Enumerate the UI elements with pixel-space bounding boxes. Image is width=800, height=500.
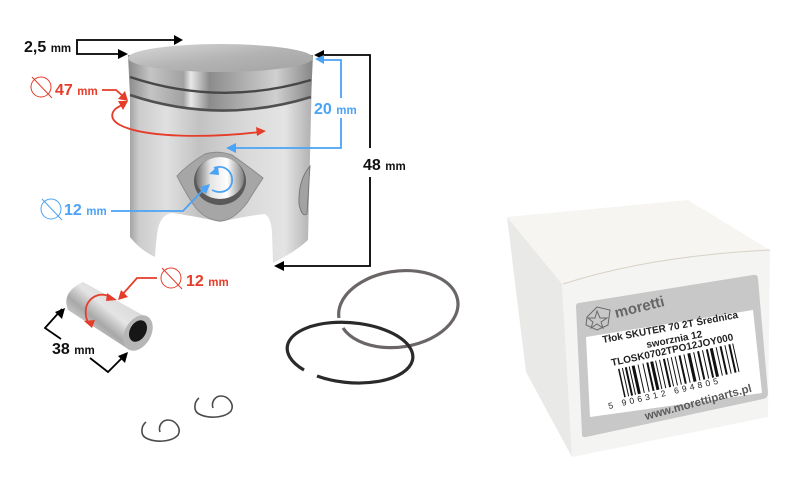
leader arrow xyxy=(111,189,204,211)
dimension: pin 12 mm xyxy=(84,268,229,328)
piston xyxy=(128,44,313,263)
dimension: bore 12 mm xyxy=(41,166,232,220)
circlip left xyxy=(142,420,179,441)
product title: Tłok SKUTER 70 2T Średnica xyxy=(601,308,739,346)
bracket line xyxy=(234,60,341,148)
piston ring bands xyxy=(128,55,313,111)
box front face xyxy=(562,250,770,457)
pin end xyxy=(117,310,159,356)
upper ring groove xyxy=(130,77,311,93)
barcode digits: 5 906312 694805 xyxy=(607,375,722,411)
circlip right xyxy=(195,396,232,417)
label 48 mm: 48 mm xyxy=(363,157,406,174)
side pin bore xyxy=(299,166,310,215)
white panel xyxy=(586,310,762,417)
arrow to piston xyxy=(102,90,125,98)
box xyxy=(507,200,770,457)
label 47 mm: 47 mm xyxy=(55,82,98,99)
product subtitle: sworznia 12 xyxy=(645,329,704,351)
barcode xyxy=(618,343,739,397)
leader arrow xyxy=(122,278,157,295)
flap edge xyxy=(563,250,770,284)
piston rings xyxy=(287,271,458,383)
label 12 mm: 12 mm xyxy=(186,273,229,290)
label xyxy=(576,275,768,437)
circumference arrow xyxy=(112,105,260,136)
pin body xyxy=(66,282,148,349)
lower ring groove xyxy=(130,95,311,111)
dimension: 2,5 mm xyxy=(24,35,183,59)
bore circle arrow xyxy=(212,167,232,192)
box top flap xyxy=(507,200,770,285)
diameter icon xyxy=(161,268,182,289)
label 2,5 mm: 2,5 mm xyxy=(24,39,71,56)
wrist pin boss xyxy=(177,152,263,221)
circlips xyxy=(142,396,232,441)
ring: rear xyxy=(339,271,458,348)
ring: front xyxy=(287,322,413,383)
diameter icon xyxy=(41,199,62,220)
piston crown xyxy=(128,44,313,72)
wrist pin bore xyxy=(194,157,246,205)
bracket line xyxy=(282,55,370,266)
pin circle arrow xyxy=(86,295,112,325)
bracket arrows xyxy=(77,40,176,54)
right bracket xyxy=(90,355,125,372)
product code: TLOSK0702TPO12JOY000 xyxy=(610,332,735,369)
box left face xyxy=(507,217,572,457)
dimension: 20 mm xyxy=(226,55,357,153)
label 38 mm: 38 mm xyxy=(52,341,95,358)
logo star xyxy=(586,307,610,330)
piston skirt xyxy=(130,72,312,263)
label background xyxy=(576,275,768,437)
brand name: moretti xyxy=(613,293,666,322)
left bracket xyxy=(45,309,62,339)
dimension: 38 mm xyxy=(45,308,128,372)
label 12 mm: 12 mm xyxy=(64,202,107,219)
wrist pin xyxy=(66,282,159,356)
dimension: 48 mm xyxy=(274,50,406,271)
diameter icon xyxy=(31,77,52,98)
label 20 mm: 20 mm xyxy=(314,101,357,118)
dimension: 47 mm xyxy=(31,77,266,136)
website: www.morettiparts.pl xyxy=(643,383,753,423)
